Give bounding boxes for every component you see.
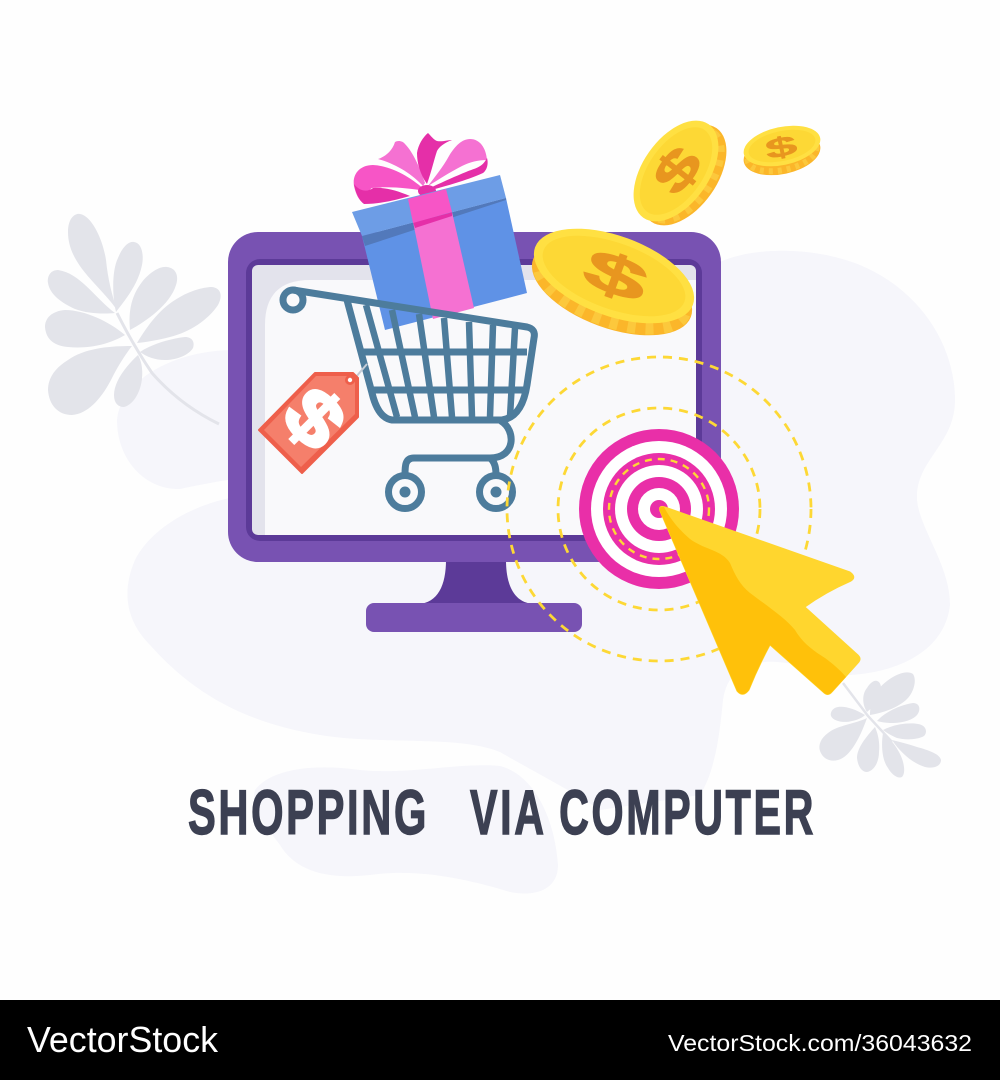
watermark logo: VectorStock xyxy=(27,1019,219,1060)
small coin xyxy=(740,119,824,182)
arrow light side xyxy=(660,506,860,694)
arrow dark side xyxy=(660,507,846,694)
screen xyxy=(252,265,696,535)
watermark url: VectorStock.com/36043632 xyxy=(668,1030,972,1056)
price tag xyxy=(259,364,367,473)
box body xyxy=(362,198,527,330)
dashed click circles xyxy=(507,357,811,661)
computer monitor xyxy=(228,232,721,632)
title: VIA COMPUTER xyxy=(470,778,816,848)
dollar sign on large coin: $ xyxy=(575,236,656,315)
cart handle xyxy=(283,290,303,310)
frame inner shadow xyxy=(246,259,702,541)
monitor stand xyxy=(418,560,534,604)
dollar sign on small coin: $ xyxy=(763,130,800,166)
ribbon on body xyxy=(413,212,474,319)
box lid xyxy=(352,175,506,236)
cart wheels xyxy=(388,476,422,508)
screen highlight xyxy=(265,280,696,535)
title: SHOPPING xyxy=(188,778,429,848)
bow xyxy=(354,133,488,204)
ribbon on lid xyxy=(408,189,452,223)
large coin xyxy=(519,210,707,354)
watermark bar xyxy=(0,1000,1000,1080)
title xyxy=(188,778,816,848)
monitor frame xyxy=(228,232,721,562)
left leaf sprig xyxy=(45,214,221,424)
dollar sign on flying coin: $ xyxy=(642,135,714,206)
dollar sign on tag: $ xyxy=(267,370,363,466)
monitor base xyxy=(366,603,582,632)
shopping cart xyxy=(283,290,534,508)
background blobs xyxy=(117,251,955,894)
cursor arrow xyxy=(660,506,860,694)
cart chassis xyxy=(405,421,511,475)
target xyxy=(579,429,739,589)
gift box xyxy=(352,133,527,330)
box lid shadow xyxy=(362,198,506,246)
flying coin xyxy=(616,105,744,241)
right leaf sprig xyxy=(819,672,941,778)
cart grid xyxy=(362,352,527,390)
